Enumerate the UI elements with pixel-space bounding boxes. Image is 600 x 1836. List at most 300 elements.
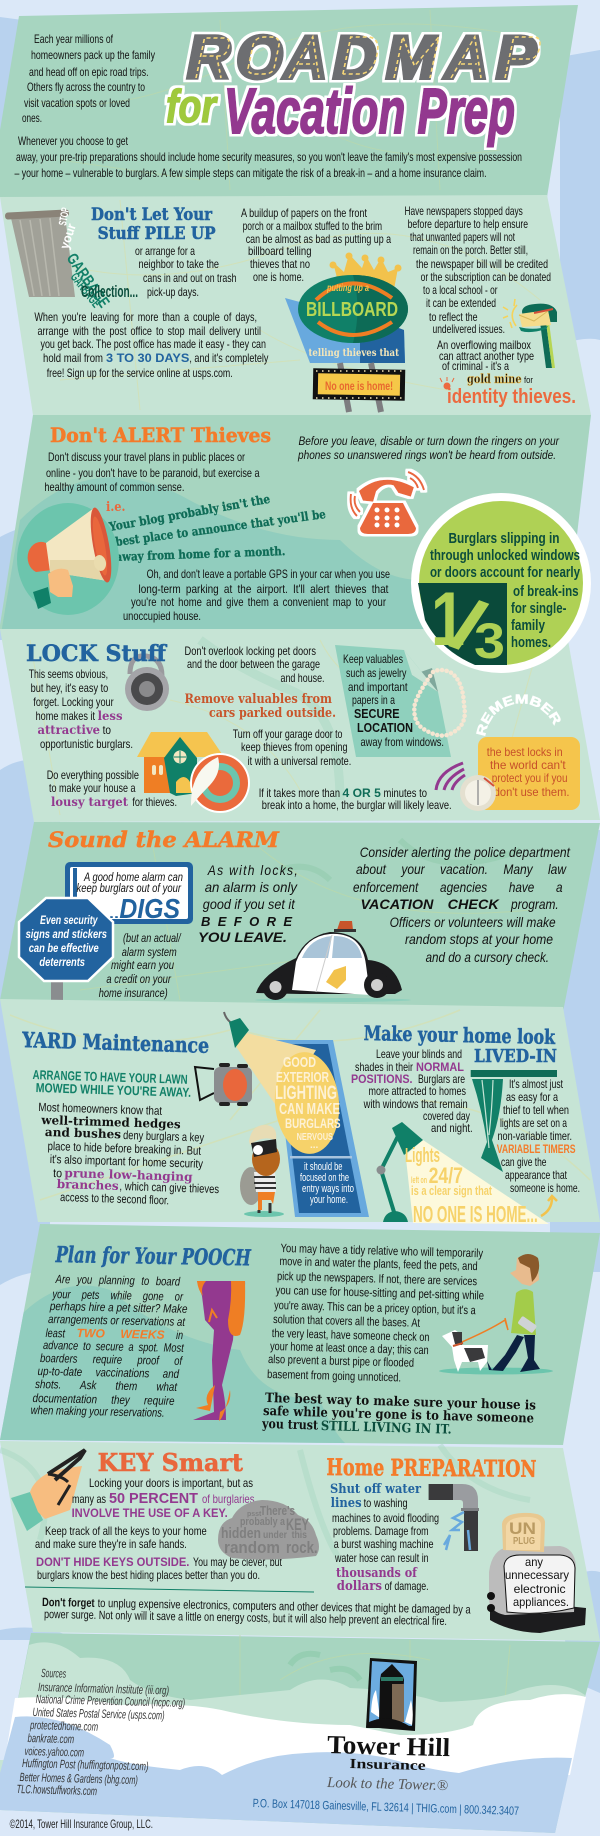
- text: travel plans: online - you don't have to be paranoid, but exercise a: [46, 466, 260, 480]
- icon: rock: KEY: [286, 1515, 309, 1534]
- text: newspapers: the newspaper bill will be credited: [416, 257, 548, 271]
- text: board pets: arrangements or reservations at: [48, 1312, 186, 1329]
- stat circle: one third: /: [442, 584, 494, 668]
- text: pet sitting: you can use for house-sitting and pet-sitting while: [275, 1283, 484, 1302]
- text: buildup of papers: thieves that no: [250, 257, 310, 271]
- text: locking doors: 50 PERCENT: [109, 1490, 198, 1507]
- text: lousy target: [47, 768, 177, 809]
- sign: digs: ...: [104, 907, 119, 921]
- text: mow lawn: [32, 1067, 191, 1100]
- icon: rock: random: [224, 1538, 280, 1557]
- text: locking doors: Locking your doors is important, but as: [89, 1476, 253, 1490]
- text: board pets: when making your reservations.: [31, 1403, 165, 1420]
- stat circle: one third: Burglars slipping in: [448, 530, 560, 547]
- text: vacation check: and do a cursory check.: [426, 949, 549, 965]
- stat circle: one third: homes.: [511, 634, 551, 651]
- text: newspapers: remain on the porch. Better still,: [413, 243, 528, 257]
- text: newspapers: to a local school - or: [423, 283, 498, 297]
- icon: trash can: [5, 207, 138, 311]
- callout: best way: you trust: [261, 1417, 318, 1434]
- icon: hand with key: [11, 1450, 85, 1531]
- text: don't forget: [25, 1587, 471, 1628]
- intro text: Each year millions of: [34, 32, 113, 46]
- text: hedges: to: [53, 1166, 63, 1180]
- text: post office: , and it's completely: [189, 351, 268, 365]
- text: remove valuables: Remove valuables from: [184, 692, 332, 707]
- sources: protectedhome.com: [29, 1718, 98, 1734]
- panel: footer: [0, 1633, 600, 1833]
- sign: digs: keep burglars out of your: [76, 881, 182, 895]
- text: pet doors: Don't overlook locking pet doors: [184, 644, 316, 658]
- note: secure location: Keep valuables: [343, 652, 403, 666]
- icon: toaster: unnecessary: [505, 1568, 569, 1582]
- text: remove valuables: [184, 692, 336, 721]
- text: board pets: least: [45, 1326, 66, 1340]
- text: locking doors: Keep track of all the keys to your home: [45, 1524, 207, 1538]
- text: water lines: Shut off water: [330, 1482, 421, 1497]
- sources: National Crime Prevention Council (ncpc.org): [36, 1692, 185, 1710]
- note: secure location: SECURE: [354, 706, 400, 721]
- icon: combination lock: [125, 656, 169, 711]
- sign: digs: A good home alarm can: [83, 870, 183, 884]
- sources: bankrate.com: [27, 1731, 74, 1746]
- stat circle: one third: [411, 493, 591, 673]
- icon: curtain: [471, 1070, 557, 1172]
- icon: small arrow: [541, 1196, 557, 1216]
- text: newspapers: to reflect the: [429, 310, 478, 324]
- icon: rock: [218, 1500, 319, 1560]
- text: hedges: well-trimmed hedges: [40, 1113, 181, 1131]
- text: timers: thief to tell when: [503, 1103, 569, 1117]
- sign: octagon: Even security: [40, 913, 99, 927]
- note: secure location: such as jewelry: [346, 666, 406, 680]
- icon: rock: under: [263, 1530, 287, 1541]
- icon: toaster: appliances.: [513, 1595, 569, 1609]
- text: hedges: it's also important for home security: [50, 1152, 203, 1171]
- callout: blog: [106, 492, 327, 564]
- sources: Insurance Information Institute (iii.org): [38, 1680, 169, 1697]
- text: board pets: in: [176, 1328, 183, 1342]
- text: newspapers: for: [524, 375, 533, 385]
- icon: megaphone: [17, 503, 119, 615]
- text: mow lawn: ARRANGE TO HAVE YOUR LAWN: [32, 1067, 188, 1087]
- note: secure location: away from windows.: [360, 735, 444, 749]
- text: locking doors: and make sure they're in safe hands.: [35, 1537, 187, 1551]
- icon: pearl necklace: [414, 670, 465, 736]
- text: hedges: deny burglars a key: [123, 1128, 204, 1145]
- text: buildup of papers: billboard telling: [248, 244, 312, 258]
- sources: Huffington Post (huffingtonpost.com): [22, 1756, 149, 1773]
- text: timers: non-variable timer.: [498, 1129, 572, 1143]
- text: obvious: This seems obvious,: [29, 667, 108, 681]
- panel: sound the alarm: [0, 822, 600, 1012]
- text: normal positions: Leave your blinds and: [376, 1047, 462, 1061]
- text: 4 or 5 minutes: minutes to: [384, 786, 427, 800]
- billboard graphic: No one is home!: [325, 379, 393, 393]
- text: GPS: you're not home and give them a convenient map to your: [131, 595, 386, 609]
- text: credit on insurance: home insurance): [99, 986, 168, 1000]
- sign: octagon: can be effective: [29, 941, 99, 955]
- text: water lines: [330, 1482, 439, 1594]
- text: board pets: up-to-date vaccinations and: [37, 1364, 179, 1381]
- icon: man walking dog: [439, 1254, 553, 1374]
- title: ROADMAP: ROADMAP: [187, 24, 537, 91]
- title: for Vacation Prep: for: [166, 80, 218, 132]
- text: locking doors: INVOLVE THE USE OF A KEY.: [72, 1506, 228, 1520]
- icon: padlock callout: protect you if you: [492, 771, 568, 785]
- text: travel plans: Don't discuss your travel plans in public places or: [48, 450, 245, 464]
- icon: padlock callout: don't use them.: [494, 785, 570, 799]
- text: obvious: [29, 667, 133, 751]
- text: normal positions: [351, 1047, 473, 1135]
- icon: police car: [255, 921, 411, 1002]
- text: vacation check: Officers or volunteers will make: [390, 914, 556, 930]
- intro text: Whenever you choose to get: [18, 134, 128, 148]
- text: hedges: prune low-hanging: [64, 1166, 193, 1184]
- note: secure location: papers in a: [352, 693, 395, 707]
- icon: toaster: UN: [509, 1519, 536, 1538]
- text: before you leave: [198, 862, 299, 945]
- text: before you leave: BEFORE: [201, 914, 292, 929]
- text: newspapers: An overflowing mailbox: [437, 338, 531, 352]
- text: newspapers: it can be extended: [426, 296, 496, 310]
- text: post office: arrange with the post office to stop mail delivery until: [38, 324, 261, 338]
- sign: exterior lighting: BURGLARS: [285, 1115, 341, 1131]
- text: buildup of papers: one is home.: [253, 270, 304, 284]
- icon: house and target: [137, 732, 250, 813]
- logo: tower hill: Tower Hill: [327, 1730, 451, 1762]
- stat circle: one third: 1: [431, 577, 465, 662]
- text: board pets: perhaps hire a pet sitter? Make: [49, 1299, 188, 1316]
- text: 4 or 5 minutes: If it takes more than: [259, 786, 340, 800]
- text: credit on insurance: alarm system: [122, 945, 177, 959]
- text: newspapers: Have newspapers stopped days: [404, 204, 523, 218]
- text: buildup of papers: porch or a mailbox stuffed to the brim: [243, 219, 382, 233]
- text: vacation check: program.: [510, 896, 559, 912]
- text: locking doors: You may be clever, but: [193, 1555, 282, 1569]
- text: water lines: water hose can result in: [334, 1551, 429, 1565]
- text: lousy target: Do everything possible: [47, 768, 139, 782]
- callout: best way: [261, 1391, 536, 1438]
- stat circle: one third: family: [511, 617, 546, 634]
- text: before you leave: good if you set it: [203, 896, 296, 912]
- text: travel plans: healthy amount of common sense.: [44, 480, 184, 494]
- icon: toaster: [487, 1513, 586, 1633]
- text: newspapers: or the subscription can be donated: [421, 270, 551, 284]
- text: lousy target: for thieves.: [132, 795, 177, 809]
- icon: padlock callout: REMEMBER: [476, 694, 561, 736]
- text: newspapers: [404, 204, 576, 408]
- text: obvious: to: [103, 723, 111, 737]
- text: vacation check: [353, 844, 571, 965]
- sources: voices.yahoo.com: [24, 1744, 84, 1760]
- copyright: ©2014, Tower Hill Insurance Group, LLC.: [10, 1817, 153, 1831]
- heading: key smart: KEY Smart: [98, 1448, 243, 1477]
- icon: toaster: PLUG: [513, 1536, 535, 1547]
- text: pet sitting: you're away. This can be a pricey option, but it's a: [274, 1298, 476, 1317]
- contact line: P.O. Box 147018 Gainesville, FL 32614 | THIG.com | 800.342.3407: [253, 1796, 519, 1818]
- text: water lines: of damage.: [385, 1579, 429, 1593]
- panel: intro: [0, 5, 578, 197]
- sign: octagon: [19, 898, 113, 1003]
- text: hedges: place to hide before breaking in. But: [47, 1139, 202, 1158]
- text: pet sitting: the very least, have someone check on: [272, 1326, 430, 1344]
- text: before you leave: YOU LEAVE.: [198, 929, 287, 945]
- sign: exterior lighting: CAN MAKE: [279, 1101, 340, 1118]
- icon: trash can: Collection...: [81, 282, 138, 301]
- text: buildup of papers: A buildup of papers on the front: [241, 206, 367, 220]
- text: locking doors: DON'T HIDE KEYS OUTSIDE.: [36, 1555, 189, 1569]
- billboard graphic: [285, 252, 408, 412]
- icon: toaster: electronic: [514, 1582, 566, 1596]
- panel: lock stuff: [0, 629, 600, 822]
- text: GPS: Oh, and don't leave a portable GPS in your car when you use: [147, 567, 390, 581]
- intro text: Others fly across the country to: [27, 80, 145, 94]
- sign: exterior lighting: GOOD: [283, 1054, 316, 1071]
- text: water lines: a burst washing machine: [334, 1537, 434, 1551]
- text: water lines: to washing: [364, 1496, 408, 1510]
- icon: lawn mower: [195, 1063, 252, 1106]
- sign: exterior lighting: LIGHTING: [275, 1083, 337, 1104]
- icon: mailbox: [503, 299, 557, 368]
- text: arrange neighbor: [135, 244, 236, 299]
- text: before you leave: As with locks,: [207, 862, 299, 878]
- text: vacation check: VACATION CHECK: [360, 896, 500, 912]
- text: board pets: boarders require proof of: [40, 1351, 184, 1368]
- icon: toaster: any: [525, 1555, 543, 1569]
- note: secure location: LOCATION: [357, 720, 413, 735]
- text: post office: [34, 310, 268, 380]
- text: don't forget: power surge. Not only will it save a little on energy costs, but it will also help prevent an electrical fire.: [44, 1607, 447, 1628]
- text: pet sitting: move in and water the plants, feed the pets, and: [279, 1254, 478, 1273]
- text: water lines: dollars: [337, 1579, 382, 1594]
- text: water lines: machines to avoid flooding: [332, 1511, 439, 1525]
- icon: rock: hidden: [221, 1525, 261, 1542]
- text: normal positions: Burglars are: [418, 1072, 465, 1086]
- logo: tower hill: [326, 1658, 451, 1794]
- text: obvious: but hey, it's easy to: [31, 681, 109, 695]
- heading: Don't ALERT Thieves: [50, 423, 271, 447]
- text: newspapers: that unwanted papers will not: [410, 230, 515, 244]
- icon: desk lamp with message: left on: [411, 1175, 427, 1185]
- text: hedges: [38, 1100, 219, 1207]
- text: timers: It's almost just: [509, 1077, 563, 1091]
- sign: exterior lighting: your home.: [310, 1194, 348, 1206]
- text: arrange neighbor: pick-up days.: [147, 285, 199, 299]
- sign: exterior lighting: NERVOUS: [297, 1132, 333, 1143]
- icon: padlock callout: the world can't: [490, 758, 566, 772]
- text: water lines: lines: [331, 1496, 362, 1511]
- text: obvious: forget. Locking your: [33, 695, 114, 709]
- text: newspapers: gold mine: [467, 372, 522, 386]
- text: buildup of papers: [241, 206, 391, 284]
- text: 4 or 5 minutes: break into a home, the burglar will likely leave.: [262, 798, 452, 812]
- clouds: [0, 1642, 586, 1833]
- sources: [16, 1666, 185, 1798]
- intro text: homeowners pack up the family: [31, 48, 155, 62]
- sign: digs: [65, 862, 193, 924]
- text: pet doors: [184, 644, 324, 685]
- intro text: and head off on epic road trips.: [29, 65, 148, 79]
- text: buildup of papers: can be almost as bad as putting up a: [246, 232, 391, 246]
- sources: Better Homes & Gardens (bhg.com): [19, 1770, 138, 1787]
- text: pet sitting: your home at least once a day; this can: [270, 1339, 429, 1357]
- icon: rock: psst: [247, 1511, 262, 1518]
- icon: desk lamp with message: is a clear sign that: [411, 1183, 492, 1198]
- text: vacation check: enforcement agencies have a: [353, 879, 563, 895]
- icon: eye: [440, 377, 454, 390]
- text: hedges: Most homeowners know that: [38, 1100, 163, 1118]
- note: secure location: [335, 645, 451, 757]
- text: before you leave: an alarm is only: [205, 879, 298, 895]
- text: board pets: your pets while gone or: [52, 1287, 184, 1304]
- heading: Stuff PILE UP: [98, 224, 216, 244]
- text: board pets: [31, 1272, 188, 1420]
- icon: trash can: your: [57, 222, 79, 251]
- text: normal positions: NORMAL: [416, 1060, 464, 1074]
- text: normal positions: covered day: [423, 1109, 470, 1123]
- text: ringers: phones so unanswered rings won't be heard from outside.: [297, 448, 556, 462]
- text: vacation check: about your vacation. Many law: [356, 861, 567, 877]
- sign: exterior lighting: it should be: [304, 1161, 342, 1173]
- text: GPS: unoccupied house.: [123, 609, 201, 623]
- text: newspapers: undelivered issues.: [432, 322, 505, 336]
- text: garage door: it with a universal remote.: [248, 754, 351, 768]
- text: mow lawn: MOWED WHILE YOU'RE AWAY.: [36, 1080, 191, 1100]
- text: timers: appearance that: [505, 1168, 567, 1182]
- text: board pets: TWO WEEKS: [76, 1326, 165, 1342]
- text: garage door: Turn off your garage door to: [233, 727, 343, 741]
- sign: exterior lighting: [224, 1012, 369, 1217]
- stat circle: one third: of break-ins: [513, 583, 579, 600]
- callout: blog: Your blog probably isn't the: [107, 492, 271, 534]
- intro text: ones.: [22, 111, 42, 125]
- text: lousy target: lousy target: [51, 795, 128, 809]
- text: obvious: less: [98, 709, 123, 723]
- text: water lines: thousands of: [336, 1566, 418, 1581]
- text: hedges: access to the second floor.: [60, 1190, 169, 1207]
- icon: telephone: [351, 472, 424, 534]
- heading: LOCK Stuff: [26, 641, 168, 667]
- text: locking doors: burglars know the best hiding places better than you do.: [37, 1568, 260, 1582]
- icon: desk lamp with message: [376, 1122, 549, 1227]
- logo: tower hill: Look to the Tower.®: [326, 1775, 448, 1794]
- icon: rock: probably a: [240, 1516, 286, 1528]
- text: credit on insurance: a credit on your: [106, 972, 172, 986]
- heading: lived-in: Make your home look: [363, 1021, 556, 1049]
- panel: yard and lived-in: [0, 999, 600, 1227]
- icon: alarm timer: [436, 763, 496, 811]
- text: board pets: shots. Ask them what: [35, 1377, 178, 1394]
- billboard graphic: telling thieves that: [308, 348, 399, 359]
- heading: lived-in: [363, 1021, 557, 1067]
- panel: plan for your pooch: [0, 1224, 600, 1450]
- logo: tower hill: Insurance: [349, 1757, 426, 1774]
- heading: yard maintenance: YARD Maintenance: [21, 1027, 210, 1058]
- heading: Don't Let Your: [91, 205, 213, 225]
- road dashes on title: [196, 37, 542, 78]
- icon: desk lamp with message: Lights: [405, 1145, 440, 1167]
- sign: exterior lighting: focused on the: [300, 1172, 349, 1184]
- text: GPS: long-term parking at the airport. It'll alert thieves that: [138, 582, 389, 596]
- billboard graphic: putting up a: [326, 283, 369, 294]
- text: locking doors: [35, 1476, 282, 1582]
- icon: dog: [193, 1281, 245, 1421]
- text: garage door: [233, 727, 351, 768]
- text: post office: When you're leaving for more than a couple of days,: [34, 310, 257, 324]
- text: vacation check: Consider alerting the police department: [360, 844, 571, 860]
- icon: rock: There's: [260, 1503, 295, 1518]
- sources: Sources: [41, 1666, 66, 1681]
- sources: United States Postal Service (usps.com): [32, 1705, 165, 1722]
- text: post office: 3 TO 30 DAYS: [106, 351, 189, 365]
- text: arrange neighbor: or arrange for a: [135, 244, 195, 258]
- callout: best way: The best way to make sure your house is: [265, 1391, 536, 1414]
- text: board pets: documentation they require: [32, 1391, 175, 1408]
- icon: trash can: GARBAGE: [63, 251, 112, 311]
- text: normal positions: more attracted to homes: [368, 1084, 466, 1098]
- text: remove valuables: cars parked outside.: [209, 706, 336, 721]
- panel: don't let your stuff pile up: [0, 195, 591, 415]
- sources: TLC.howstuffworks.com: [16, 1782, 97, 1798]
- text: newspapers: identity thieves.: [447, 386, 576, 408]
- icon: rock: this: [292, 1530, 307, 1541]
- icon: trash can: GARBAGE: [68, 270, 104, 311]
- text: timers: as easy for a: [506, 1090, 558, 1104]
- text: pet doors: and the door between the garage: [187, 657, 320, 671]
- text: credit on insurance: (but an actual/: [123, 931, 182, 945]
- text: post office: free! Sign up for the service online at usps.com.: [47, 366, 233, 380]
- icon: pipe: [429, 1484, 479, 1551]
- intro text: visit vacation spots or loved: [24, 96, 130, 110]
- text: hedges: , which can give thieves: [119, 1179, 219, 1196]
- text: normal positions: POSITIONS.: [351, 1072, 412, 1086]
- billboard graphic: BILLBOARD: [306, 299, 398, 321]
- text: newspapers: can attract another type: [439, 349, 534, 363]
- callout: best way: safe while you're gone is to have someone: [263, 1404, 534, 1427]
- text: post office: you get back. The post office has made it easy - they can: [40, 337, 266, 351]
- text: normal positions: with windows that remain: [363, 1097, 468, 1111]
- sign: exterior lighting: EXTERIOR: [276, 1069, 329, 1086]
- text: pet sitting: also prevent a burst pipe or flooded: [268, 1352, 414, 1370]
- heading: [91, 205, 216, 244]
- text: arrange neighbor: neighbor to take the: [138, 257, 219, 271]
- icon: trash can: STOP: [57, 207, 72, 227]
- note: secure location: and important: [348, 680, 408, 694]
- icon: padlock callout: [476, 694, 580, 810]
- text: timers: can give the: [501, 1155, 547, 1169]
- text: water lines: problems. Damage from: [333, 1524, 429, 1538]
- text: board pets: Are you planning to board: [55, 1272, 180, 1289]
- text: pet sitting: You may have a tidy relative who will temporarily: [280, 1241, 483, 1260]
- text: pet doors: and house.: [280, 671, 324, 685]
- text: 4 or 5 minutes: 4 OR 5: [342, 786, 381, 800]
- sign: octagon: signs and stickers: [26, 927, 107, 941]
- text: credit on insurance: [99, 931, 182, 1000]
- stat circle: one third: for single-: [511, 600, 566, 617]
- text: lousy target: to make your house a: [49, 781, 136, 795]
- text: hedges: and bushes: [45, 1125, 122, 1141]
- text: pet sitting: solution that covers all the bases. At: [273, 1312, 421, 1330]
- text: ringers: [297, 434, 560, 462]
- text: normal positions: shades in their: [355, 1060, 413, 1074]
- text: obvious: attractive: [38, 723, 100, 737]
- text: locking doors: of burglaries: [202, 1492, 254, 1506]
- callout: blog: i.e.: [106, 500, 126, 515]
- text: arrange neighbor: cans in and out on trash: [143, 271, 236, 285]
- text: garage door: keep thieves from opening: [241, 740, 348, 754]
- text: pet sitting: [267, 1241, 484, 1385]
